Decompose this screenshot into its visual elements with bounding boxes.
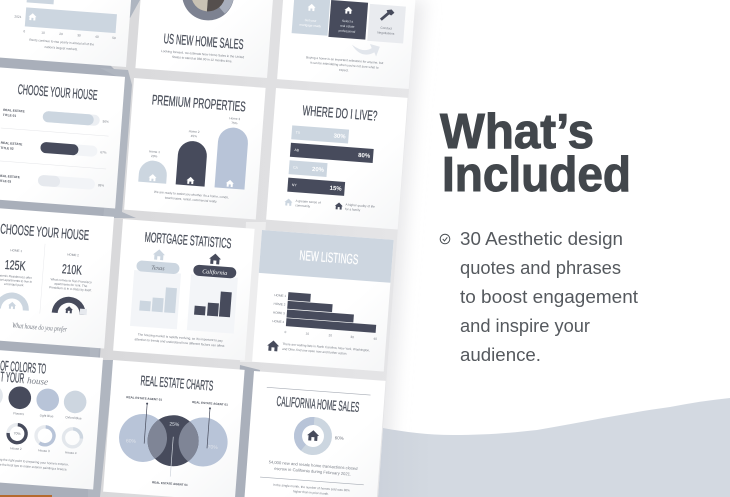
card: palette of colors: 70% bbox=[13, 431, 21, 436]
left panel bbox=[130, 248, 183, 329]
body text: audience. bbox=[460, 345, 541, 365]
title bbox=[0, 357, 50, 388]
legend bbox=[284, 198, 375, 213]
home 2: What comes to San Francisco bbox=[50, 277, 92, 284]
bar chart: 30 bbox=[350, 335, 354, 339]
color swatches: Flowers bbox=[13, 411, 25, 416]
row 3 bbox=[0, 172, 105, 191]
card: buying steps bbox=[277, 0, 419, 89]
bars: 10 bbox=[41, 31, 45, 35]
card: premium properties: townhouses, rental, commercial realty. bbox=[165, 196, 218, 204]
step boxes: Conduct bbox=[380, 26, 392, 31]
legend: A greater sense of bbox=[295, 199, 321, 205]
card: california home sales: higher than in prior month. bbox=[293, 489, 329, 496]
heading bbox=[440, 105, 631, 202]
house icon bbox=[267, 340, 280, 351]
card: california home sales: escrow in California during February 2021. bbox=[274, 466, 351, 477]
heading: Included bbox=[442, 148, 631, 202]
card: palette of colors: House 3 bbox=[38, 448, 50, 453]
bars: 2021 bbox=[14, 15, 22, 19]
card: palette of colors: OF COLORS TO bbox=[0, 357, 47, 377]
bars: 15% bbox=[329, 186, 342, 193]
bars bbox=[13, 0, 119, 40]
card: buying steps: it can be intimidating when you're not sure what to bbox=[310, 61, 379, 70]
bar chart: 20 bbox=[328, 333, 332, 338]
arch 1: Home 1 bbox=[149, 149, 160, 154]
card: where do i live bbox=[266, 88, 408, 230]
donut bbox=[180, 0, 236, 22]
legend: A higher quality of life bbox=[345, 203, 375, 209]
step boxes: Select a bbox=[342, 19, 354, 24]
title: T YOUR bbox=[0, 368, 25, 386]
row 2: REAL ESTATE bbox=[1, 141, 22, 146]
card: california home sales: In the single month, the number of homes sold was 30% bbox=[273, 483, 350, 493]
title: PREMIUM PROPERTIES bbox=[151, 91, 246, 114]
ring charts bbox=[0, 422, 82, 447]
bar chart: HOME 4 bbox=[272, 319, 285, 324]
color swatches: Oxford Blue bbox=[65, 415, 82, 420]
card: premium properties bbox=[124, 78, 266, 220]
agent labels bbox=[120, 395, 228, 490]
home 2: HOME 2 bbox=[67, 252, 79, 257]
row 2: TITLE 02 bbox=[0, 146, 14, 151]
step boxes bbox=[291, 0, 406, 43]
bars: AB bbox=[294, 148, 300, 152]
bar chart: 40 bbox=[373, 337, 377, 341]
title: CHOOSE YOUR HOUSE bbox=[0, 220, 90, 243]
arch 3: Home 3 bbox=[229, 116, 241, 121]
body text bbox=[460, 229, 638, 365]
bar chart: 10 bbox=[305, 332, 309, 336]
body text: to boost engagement bbox=[460, 287, 638, 307]
card: rents bar chart: nation's largest markets. bbox=[44, 45, 78, 51]
card: real estate charts bbox=[103, 360, 245, 497]
bar chart bbox=[271, 291, 380, 341]
donut: 60% bbox=[335, 435, 344, 441]
home 2: Presidium is in a class by itself. bbox=[49, 285, 92, 292]
card: mortgage statistics: attention to trends and understand how different factors can affect. bbox=[134, 337, 225, 348]
title: US NEW HOME SALES bbox=[163, 30, 244, 52]
arch 3: 75% bbox=[231, 121, 238, 125]
right panel bbox=[187, 252, 240, 334]
step boxes: Negotiations bbox=[377, 31, 395, 36]
row 2 bbox=[0, 139, 107, 158]
row 1 bbox=[3, 108, 110, 127]
agent labels: REAL ESTATE AGENT 01 bbox=[152, 480, 188, 487]
left panel: Texas bbox=[151, 265, 165, 272]
venn diagram: 25% bbox=[169, 421, 180, 428]
arch 2: 45% bbox=[191, 134, 197, 138]
agent labels: REAL ESTATE AGENT 01 bbox=[192, 400, 228, 407]
card: choose your house compare bbox=[0, 207, 114, 349]
arch 2 bbox=[176, 129, 209, 187]
body text: and inspire your bbox=[460, 316, 590, 336]
mockup shadow bbox=[360, 0, 425, 497]
bar chart: HOME 2 bbox=[273, 302, 286, 307]
row 1: TITLE 01 bbox=[3, 113, 16, 118]
card: palette of colors: House 4 bbox=[65, 450, 77, 455]
caption: The housing market is rapidly evolving, so it's important to pay bbox=[138, 332, 223, 343]
card: california home sales: CALIFORNIA HOME SALES bbox=[276, 393, 360, 415]
caption: Looking forward, we estimate New Home Sales in the United bbox=[161, 49, 245, 59]
arch 3 bbox=[215, 116, 250, 190]
bar chart: 0 bbox=[284, 330, 287, 334]
row 3: 39% bbox=[98, 183, 104, 188]
card: rents bar chart bbox=[0, 0, 136, 67]
home 2: apartments for rent. The bbox=[54, 282, 88, 288]
card: new listings: and Ohio, find one open now and further action. bbox=[282, 347, 348, 356]
mockup collage bbox=[0, 0, 419, 497]
step boxes: professional bbox=[338, 29, 356, 34]
title: MORTGAGE STATISTICS bbox=[144, 229, 232, 251]
bars: 20% bbox=[312, 167, 325, 174]
venn diagram: 70% bbox=[207, 444, 218, 451]
bars: 30 bbox=[77, 33, 81, 38]
venn diagram bbox=[119, 414, 228, 466]
caption: Rents continue to rise yearly in almost all of the bbox=[29, 38, 94, 47]
heading: What’s bbox=[440, 105, 594, 159]
right panel: California bbox=[202, 268, 227, 277]
wave bbox=[378, 398, 730, 497]
card: buying steps: expect. bbox=[339, 68, 349, 72]
bars: 30% bbox=[333, 133, 346, 140]
gutters bbox=[0, 0, 415, 497]
arrow bbox=[351, 43, 380, 57]
card: us new home sales bbox=[135, 0, 277, 78]
bars: 40 bbox=[95, 35, 99, 39]
caption: We are ready to assist you whether it's a home, condo, bbox=[154, 190, 229, 199]
card: real estate charts: REAL ESTATE CHARTS bbox=[140, 372, 214, 394]
legend: for a family bbox=[345, 207, 361, 212]
caption: 54,000 new and resale home transactions closed bbox=[269, 459, 358, 471]
caption: Buying a home is an important milestone for anyone, but bbox=[306, 55, 384, 65]
step boxes: mortgage ready bbox=[299, 23, 322, 28]
home 2: 210K bbox=[61, 261, 83, 278]
step boxes: Get your bbox=[305, 18, 317, 23]
title: house bbox=[27, 375, 48, 387]
row 2: 67% bbox=[100, 150, 107, 155]
home 1: HOME 1 bbox=[10, 248, 23, 253]
home 1 bbox=[0, 247, 35, 311]
bars bbox=[287, 125, 375, 198]
row 1: 90% bbox=[102, 119, 109, 124]
arch 1: 20% bbox=[151, 154, 158, 158]
title: CHOOSE YOUR HOUSE bbox=[17, 81, 98, 103]
caption: There are waiting lists in North Carolina, New York, Washington, bbox=[282, 342, 370, 352]
header bbox=[259, 230, 394, 283]
card: us new home sales: States to stand at 860.00 in 12 months time. bbox=[172, 55, 233, 63]
bars: TX bbox=[296, 131, 301, 135]
home 1: a tranquil park bbox=[4, 282, 24, 287]
card: palette of colors bbox=[0, 348, 103, 490]
body text: quotes and phrases bbox=[460, 258, 621, 278]
bars: 20 bbox=[59, 32, 63, 36]
ring labels: House 2 bbox=[10, 446, 22, 451]
body text: 30 Aesthetic design bbox=[460, 229, 623, 249]
icon: check badge bbox=[440, 234, 450, 244]
venn diagram: 60% bbox=[126, 438, 137, 445]
color swatches bbox=[0, 384, 87, 421]
row 1: REAL ESTATE bbox=[3, 108, 25, 113]
arch 2: Home 2 bbox=[189, 129, 200, 134]
bars: CA bbox=[293, 166, 299, 170]
color swatches: Light Blue bbox=[40, 413, 54, 418]
card: mortgage statistics bbox=[113, 219, 255, 361]
donut bbox=[297, 420, 345, 453]
bar chart: HOME 3 bbox=[273, 310, 285, 315]
card: california home sales bbox=[244, 371, 386, 497]
card: choose your house bars bbox=[0, 67, 125, 209]
bars: NY bbox=[292, 183, 297, 187]
bar chart: HOME 1 bbox=[274, 293, 287, 298]
bars: 80% bbox=[358, 153, 371, 160]
card: new listings bbox=[252, 230, 394, 372]
bars: 50 bbox=[112, 36, 116, 40]
arch 1 bbox=[138, 149, 169, 184]
step boxes: real estate bbox=[340, 24, 355, 29]
home 2 bbox=[47, 251, 95, 315]
title: WHERE DO I LIVE? bbox=[302, 102, 378, 124]
bars: 0 bbox=[23, 29, 26, 33]
agent labels: REAL ESTATE AGENT 01 bbox=[126, 395, 162, 402]
script caption: What house do you prefer bbox=[12, 321, 67, 334]
legend: community bbox=[295, 203, 311, 208]
home 1: 125K bbox=[4, 257, 26, 273]
title: NEW LISTINGS bbox=[299, 247, 359, 267]
